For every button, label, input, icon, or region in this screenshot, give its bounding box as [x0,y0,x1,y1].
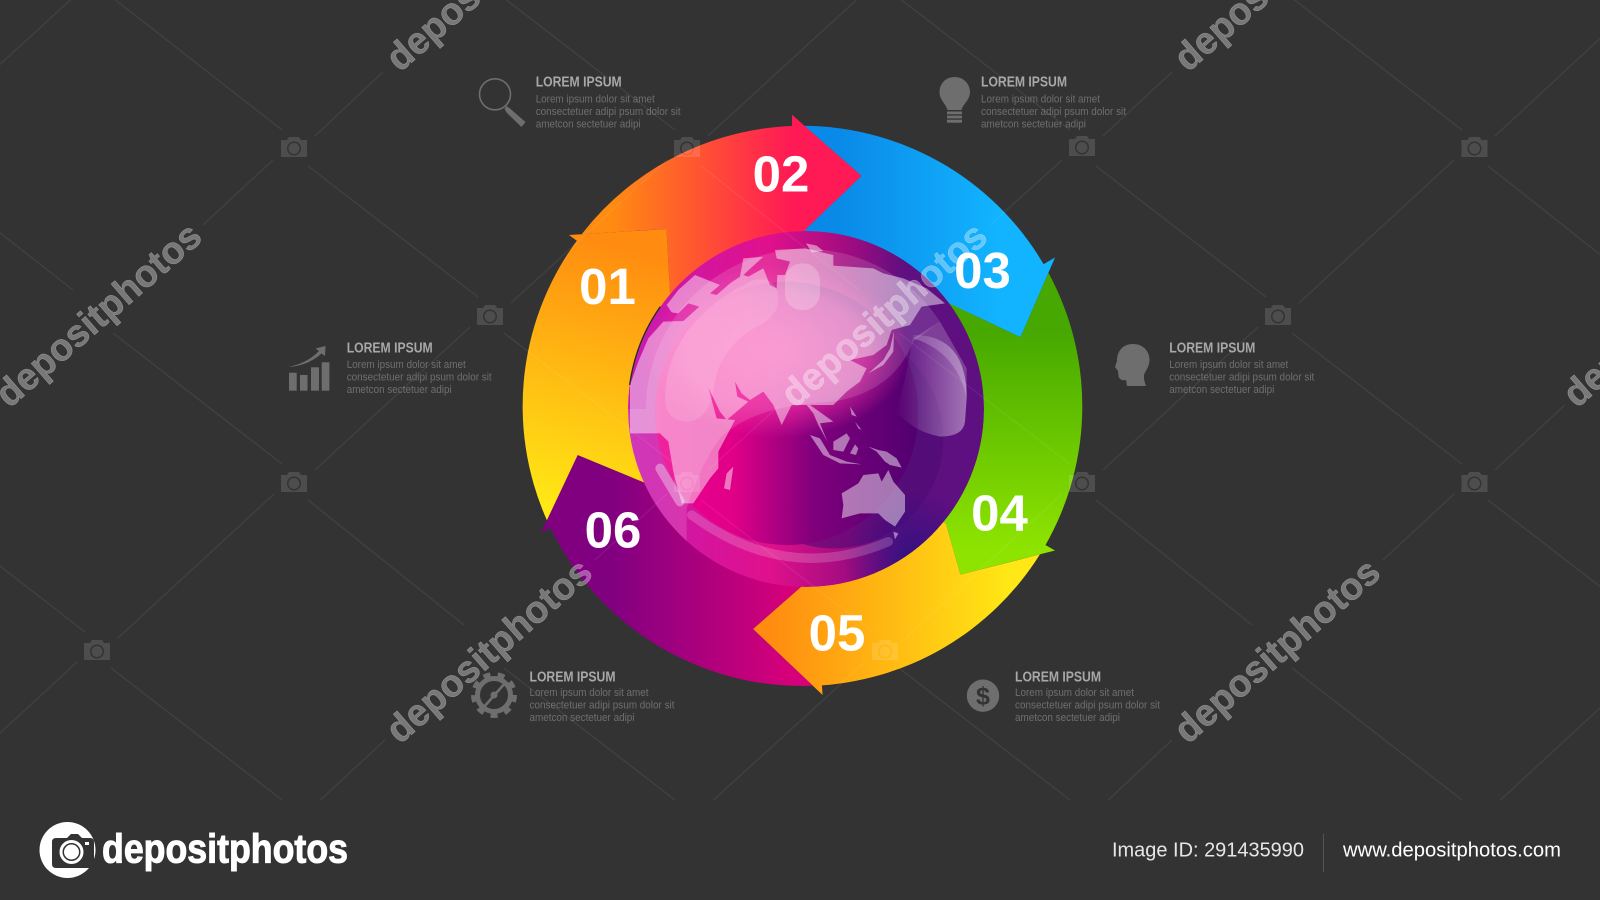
step numbers: 01 [579,258,636,315]
step numbers: 06 [585,501,641,558]
text: people: ametcon sectetuer adipi [1169,384,1274,396]
text: growth: ametcon sectetuer adipi [347,384,452,396]
icon: magnifying glass [480,79,526,127]
arrow 06: magenta to purple [541,406,813,686]
text: idea: Lorem ipsum dolor sit amet [981,94,1100,106]
text: money [1015,670,1160,724]
info block: search [480,74,681,130]
continents [630,243,945,539]
text: growth: Lorem ipsum dolor sit amet [347,359,466,371]
text: people: consectetuer adipi psum dolor sit [1169,372,1314,384]
text: settings: ametcon sectetuer adipi [530,712,634,724]
text: people [1169,340,1314,396]
text: growth [347,340,492,396]
text: settings: LOREM IPSUM [530,670,616,686]
text: people: Lorem ipsum dolor sit amet [1169,359,1288,371]
step numbers: 03 [954,242,1011,299]
info block: money [967,670,1160,724]
text: idea: ametcon sectetuer adipi [981,118,1086,130]
step numbers: 02 [753,145,809,202]
arrow 01: yellow to orange [523,229,802,520]
text: growth: LOREM IPSUM [347,340,433,356]
image id: Image ID: 291435990 [1112,840,1304,862]
arrow 04: green [802,273,1082,575]
watermark wordmarks: depositphotos [378,551,600,752]
text: money: consectetuer adipi psum dolor sit [1015,700,1160,712]
info block: growth [288,340,492,396]
text: search: ametcon sectetuer adipi [536,118,641,130]
text: settings: Lorem ipsum dolor sit amet [530,687,648,699]
text: growth: consectetuer adipi psum dolor sit [347,372,492,384]
watermark wordmarks: depositphotos [1166,551,1388,752]
text: search: consectetuer adipi psum dolor sit [536,106,681,118]
icon: head silhouette [1115,344,1150,386]
step numbers: 05 [809,604,865,661]
text: money: ametcon sectetuer adipi [1015,712,1120,724]
text: idea: LOREM IPSUM [981,74,1067,90]
text: search [536,74,681,130]
arrow 02: orange to red [582,115,862,406]
icon: dollar coin: $ [976,682,990,710]
text: people: LOREM IPSUM [1169,340,1255,356]
info block: settings [474,670,674,724]
text: idea [981,74,1126,130]
step numbers [579,145,1028,661]
logo wordmark: depositphotos [102,826,348,872]
text: settings [530,670,674,724]
step numbers: 04 [971,485,1028,542]
arrow 03: blue [802,126,1055,406]
text: search: LOREM IPSUM [536,74,622,90]
info block: people [1115,340,1314,396]
glass highlights [628,249,967,545]
watermark wordmarks: depositphotos [773,215,995,416]
globe [628,231,984,587]
info block: idea [940,74,1126,130]
website url: www.depositphotos.com [1342,840,1561,862]
icon: bar chart with arrow [288,346,329,391]
icon: gear with compass needle [474,674,514,716]
text: money: Lorem ipsum dolor sit amet [1015,687,1134,699]
panel: circular arrow diagram [523,115,1082,695]
text: settings: consectetuer adipi psum dolor sit [530,700,674,712]
watermark cameras [84,136,1488,660]
footer band [0,800,1600,900]
icon: light bulb [940,77,970,123]
logo mark: camera in circle [40,822,96,878]
arrow 05: yellow to orange [753,406,1040,695]
text: search: Lorem ipsum dolor sit amet [536,94,655,106]
text: money: LOREM IPSUM [1015,670,1101,686]
icon: dollar coin [967,680,999,712]
text: idea: consectetuer adipi psum dolor sit [981,106,1126,118]
